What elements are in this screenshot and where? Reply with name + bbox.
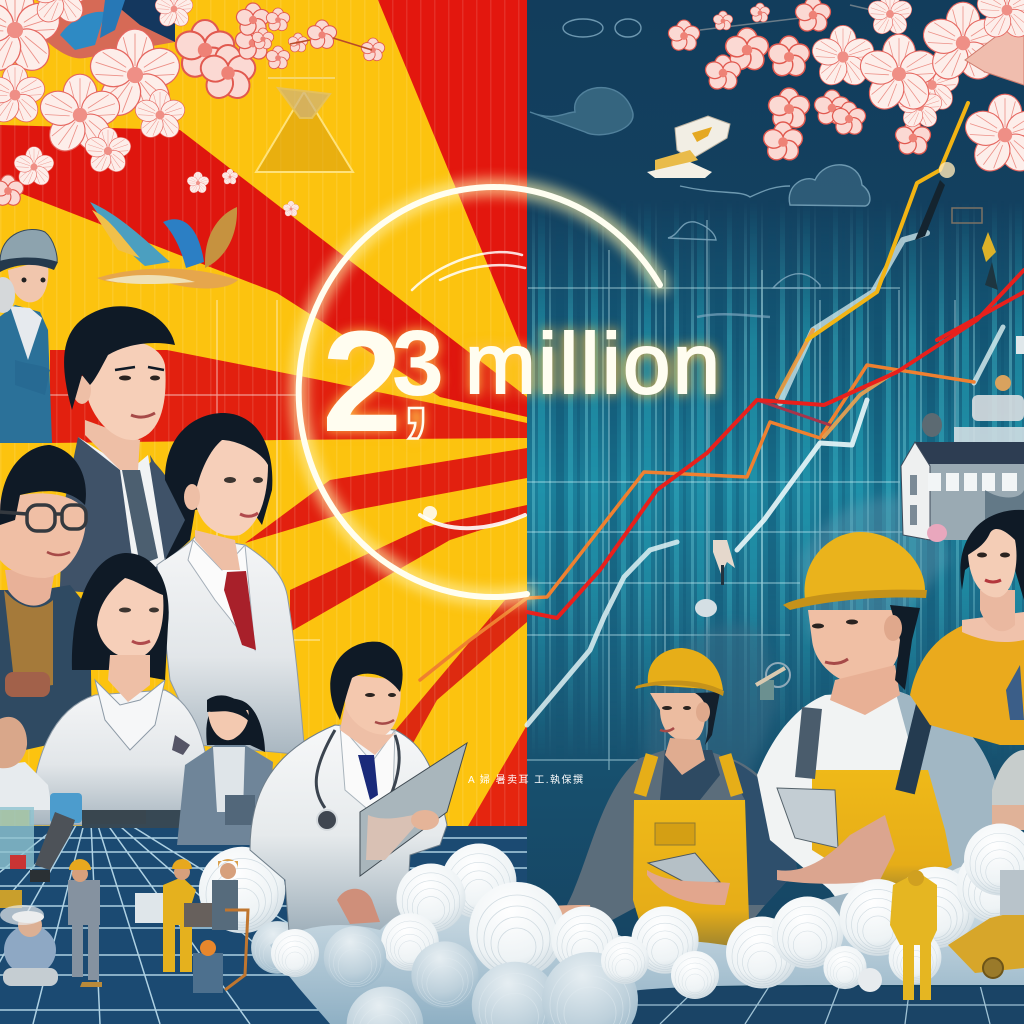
person: large worker with hard hat (757, 532, 1000, 935)
glowing ring (299, 187, 660, 597)
icon: warning triangle (256, 78, 353, 172)
blossoms: top left cherry cluster (0, 0, 386, 218)
panel: floor grid left (0, 826, 527, 1024)
person: worker with blue hard hat (0, 230, 58, 443)
person: center worker with yellow overalls (518, 648, 797, 957)
panel: left yellow and red sunburst background (0, 0, 527, 826)
cloud bank base (270, 857, 1024, 1024)
person: man with glasses (0, 445, 92, 750)
house on the right hill (901, 427, 1024, 542)
clouds behind the figures (199, 847, 304, 974)
person: doctor with stethoscope and clipboard (250, 642, 467, 945)
person: woman at far right (910, 510, 1024, 830)
person: woman in white coat with red tie (157, 413, 305, 755)
person: man in dark suit (60, 306, 186, 600)
panel: right blue teal background (527, 0, 1024, 1024)
small workers at bottom left (0, 859, 248, 993)
heading: 2,3 million: 3 (392, 311, 444, 415)
small climbers on the chart (695, 162, 1024, 700)
icon: floating gadget (647, 116, 730, 178)
person: seated older man and desk (0, 717, 146, 908)
decorative clouds: line art swirls (530, 19, 995, 582)
heading: 2,3 million: , (402, 333, 430, 445)
heading: 2,3 million glow (322, 301, 720, 462)
worker in yellow suit with machine (858, 870, 1024, 1000)
blossoms: top right cherry cluster (667, 0, 1024, 178)
heading: 2,3 million (322, 301, 720, 462)
heading: 2,3 million glow: 2 (322, 301, 402, 462)
heading: 2,3 million: million (465, 317, 720, 412)
heading: 2,3 million glow: million (465, 317, 720, 412)
person: woman in white shirt (30, 553, 213, 828)
clouds in front of the figures (271, 824, 1024, 1024)
icon: phoenix bird (90, 202, 238, 288)
heading: 2,3 million: 2 (322, 301, 402, 462)
heading: 2,3 million glow: , (402, 333, 430, 445)
panel: floor grid right (638, 987, 1024, 1024)
person: small woman in gray vest (177, 695, 273, 845)
small text line: A 婦 暑卖耳 工.執保撰 (468, 773, 583, 786)
icon: colourful ribbon bird at the top (40, 0, 175, 58)
chart: rising line graph (420, 103, 1024, 725)
heading: 2,3 million glow: 3 (392, 311, 444, 415)
